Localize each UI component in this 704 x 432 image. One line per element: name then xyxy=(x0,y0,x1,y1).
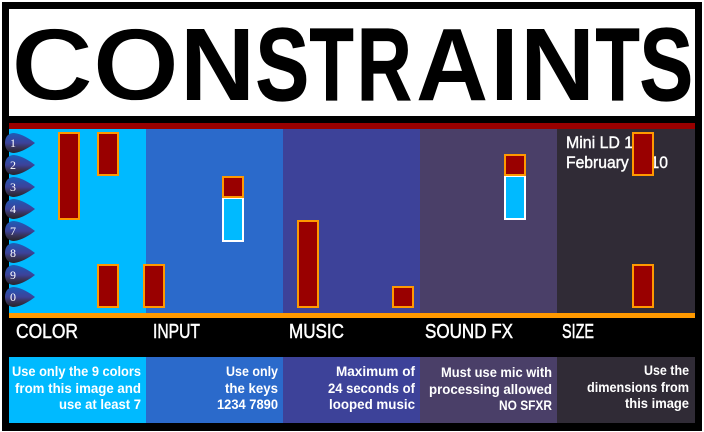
title: CONSTRAINTS: S xyxy=(640,6,693,122)
event text: Mini LD 16 xyxy=(566,133,642,152)
panel: music rule: looped music xyxy=(329,396,415,412)
panel: music rule xyxy=(283,357,420,423)
key 2 xyxy=(5,155,35,175)
title: CONSTRAINTS: C xyxy=(11,7,94,123)
bottom orange rule xyxy=(9,313,695,318)
key 1: 1 xyxy=(10,136,16,150)
heading: music: MUSIC xyxy=(289,321,344,343)
event text: February 2010 xyxy=(566,153,668,172)
panel: input rule: Use only xyxy=(226,363,278,379)
heading: color: COLOR xyxy=(16,321,78,343)
title: CONSTRAINTS xyxy=(11,6,693,123)
key 0 xyxy=(5,287,35,307)
title: CONSTRAINTS: I xyxy=(490,6,519,122)
panel: color rule: use at least 7 xyxy=(59,396,141,412)
key 2: 2 xyxy=(10,158,16,172)
heading: size: SIZE xyxy=(562,321,594,343)
title: CONSTRAINTS: N xyxy=(180,6,255,122)
panel: size rule: this image xyxy=(625,395,689,411)
panel: sound fx rule: processing allowed xyxy=(429,381,552,397)
key 1 xyxy=(5,133,35,153)
heading: sound fx: SOUND FX xyxy=(425,321,513,343)
panel: size rule: dimensions from xyxy=(587,379,689,395)
key 3 xyxy=(5,177,35,197)
panel: input rule: 1234 7890 xyxy=(217,396,278,412)
heading: input: INPUT xyxy=(153,321,200,343)
key 0: 0 xyxy=(10,290,16,304)
key 7: 7 xyxy=(10,224,16,238)
key 7 xyxy=(5,221,35,241)
key 4: 4 xyxy=(10,202,16,216)
key 8: 8 xyxy=(10,246,16,260)
key 4 xyxy=(5,199,35,219)
column: input xyxy=(146,129,283,313)
top red rule xyxy=(9,123,695,129)
key 9 xyxy=(5,265,35,285)
title: CONSTRAINTS: T xyxy=(596,6,640,122)
title: CONSTRAINTS: N xyxy=(520,6,595,122)
key 8 xyxy=(5,243,35,263)
title: CONSTRAINTS: T xyxy=(310,6,354,122)
panel: sound fx rule xyxy=(420,357,557,423)
title: CONSTRAINTS: R xyxy=(357,8,412,123)
chart area: key grid xyxy=(5,123,695,318)
title banner xyxy=(9,6,695,123)
column headings xyxy=(16,321,594,343)
panel: size rule: Use the xyxy=(644,362,689,378)
key 9: 9 xyxy=(10,268,16,282)
key markers xyxy=(5,133,35,307)
title: CONSTRAINTS: S xyxy=(256,6,309,122)
column: sound fx xyxy=(420,129,557,313)
panel: music rule: Maximum of xyxy=(336,363,415,379)
panel: color rule xyxy=(9,357,146,423)
panel: sound fx rule: NO SFXR xyxy=(499,397,552,413)
panel: input rule: the keys xyxy=(225,380,278,396)
column: music xyxy=(283,129,420,313)
key 3: 3 xyxy=(10,180,16,194)
panel: music rule: 24 seconds of xyxy=(328,380,415,396)
panel: input rule xyxy=(146,357,283,423)
panel: color rule: Use only the 9 colors xyxy=(12,363,141,379)
event text xyxy=(566,133,668,172)
panel: size rule xyxy=(557,357,695,423)
column: size xyxy=(557,129,695,313)
title: CONSTRAINTS: A xyxy=(416,7,488,122)
title: CONSTRAINTS: O xyxy=(92,6,180,122)
column: color xyxy=(9,129,146,313)
panel: color rule: from this image and xyxy=(15,380,141,396)
panel: sound fx rule: Must use mic with xyxy=(441,364,552,380)
note blocks: red and cyan xyxy=(59,133,653,307)
